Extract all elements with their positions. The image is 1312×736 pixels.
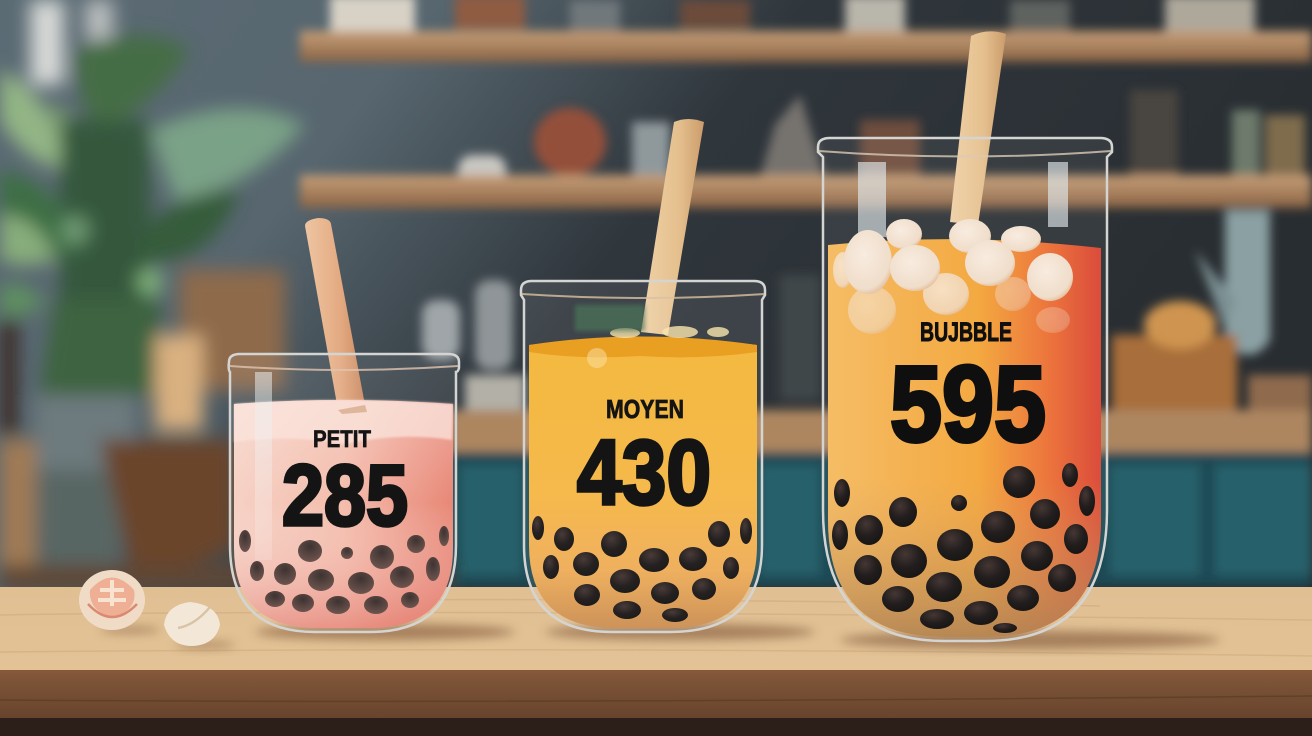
- glass: medium cup: [521, 281, 765, 632]
- icon: candy swirl: [79, 570, 145, 630]
- liquid: pink tea: [234, 400, 453, 628]
- medium cup: Moyen 430: [521, 119, 765, 632]
- straw: medium cup: [641, 119, 704, 335]
- ice and pearls at surface: [833, 219, 1073, 334]
- label: BUJBBLE: BUJBBLE: [920, 317, 1012, 347]
- glass: small cup: [229, 354, 459, 632]
- glass highlight: small cup: [255, 372, 272, 560]
- value: 595: 595: [890, 343, 1046, 464]
- straw: large cup: [950, 31, 1006, 225]
- cup shadows on table: [100, 624, 1220, 649]
- wooden table: [0, 587, 1312, 736]
- foam: [234, 400, 453, 444]
- value: 285: 285: [282, 448, 408, 544]
- glass: large cup: [818, 138, 1112, 641]
- background: shelves and objects: [300, 0, 1312, 587]
- liquid: orange tea: [828, 239, 1101, 637]
- glass highlights: large cup upper: [858, 162, 1068, 237]
- small cup: Petit 285: [229, 218, 459, 632]
- liquid: amber tea: [529, 338, 757, 628]
- label: MOYEN: MOYEN: [606, 394, 684, 424]
- tapioca pearls: large cup: [832, 463, 1095, 633]
- straw: small cup: [305, 218, 365, 410]
- icon: white candy: [164, 602, 220, 646]
- tapioca pearls: small cup: [239, 526, 449, 614]
- value: 430: 430: [577, 422, 711, 524]
- large cup: Bubble 595: [818, 31, 1112, 641]
- label: PETIT: PETIT: [313, 426, 371, 453]
- tapioca pearls: medium cup: [532, 516, 752, 622]
- background: potted plant: [0, 0, 450, 590]
